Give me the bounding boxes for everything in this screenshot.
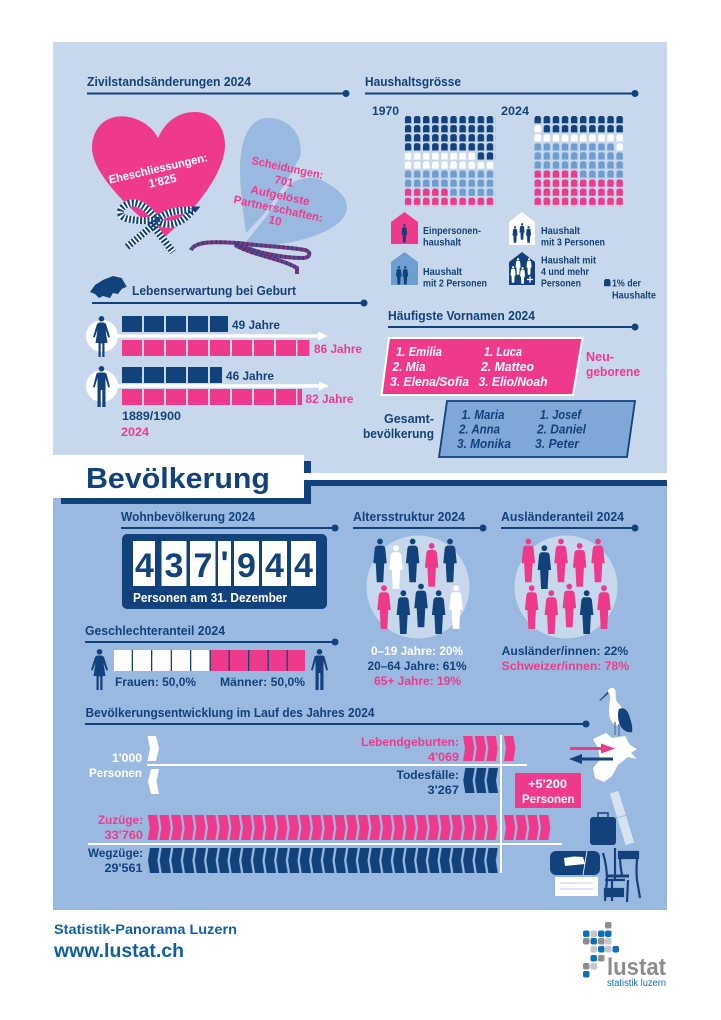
label: Männer: Männer: 50,0% [220, 675, 305, 689]
panel: Neugeborene names: 3. Elio/Noah [478, 375, 548, 389]
label: Eheschliessungen: Eheschliessungen: [108, 152, 209, 187]
section: Lebenserwartung [86, 276, 368, 439]
section: Bevölkerungsentwicklung [85, 688, 640, 902]
icon: stork [599, 688, 632, 736]
value: 46 Jahre: 46 Jahre [226, 369, 274, 383]
bar: Lebendgeburten [463, 736, 516, 761]
bar: women 2024 [122, 340, 310, 356]
legend: Haushalt mit 3 Personen: Haushalt [541, 226, 581, 237]
panel: Neugeborene names: 3. Elena/Sofia [390, 375, 469, 389]
labels: age groups: 65+ Jahre: 19% [374, 674, 461, 688]
bar: Zuzüge [148, 815, 551, 840]
panel: Neugeborene names: 2. Matteo [480, 360, 534, 374]
legend: Haushalt mit 3 Personen: mit 3 Personen [541, 238, 605, 248]
legend: Einpersonenhaushalt [391, 212, 481, 248]
label: Neugeborene: geborene [586, 365, 640, 379]
label: Scheidungen: Scheidungen: [250, 155, 324, 182]
logo: lustat [583, 922, 666, 989]
labels: age groups: 20–64 Jahre: 61% [368, 659, 467, 673]
legend: 1% der Haushalte: 1% der [612, 278, 641, 290]
icon: suitcase [590, 813, 616, 845]
section: Zivilstandsänderungen [87, 75, 350, 274]
bar: Todesfälle [463, 768, 498, 793]
heading: Lebenserwartung: Lebenserwartung bei Geburt [132, 284, 297, 298]
panel: Gesamtbevölkerung names: 2. Anna [458, 422, 500, 436]
callout: +5'200 Personen [515, 773, 581, 808]
legend: Haushalt mit 2 Personen: mit 2 Personen [423, 278, 487, 290]
legend: Haushalt mit 4 und mehr Personen: Personen [541, 278, 581, 290]
legend: Haushalt mit 4 und mehr Personen [509, 252, 597, 290]
legend: years: 2024 [121, 425, 149, 439]
counter: 437'944: 4 [265, 547, 284, 585]
legend: Einpersonenhaushalt: haushalt [423, 238, 462, 248]
counter: 437'944: 4 [135, 547, 154, 585]
heading: Zivilstandsänderungen: Zivilstandsänderungen 2024 [87, 75, 251, 89]
section: Ausländeranteil [501, 510, 638, 673]
label: Neugeborene [586, 350, 640, 379]
arrow: women [116, 332, 328, 340]
panel: Gesamtbevölkerung names: 3. Peter [535, 437, 580, 451]
footer: source text: www.lustat.ch [53, 941, 184, 962]
label: Gesamtbevölkerung [363, 412, 434, 441]
icon: chairs [603, 848, 640, 902]
scale axes [88, 735, 562, 873]
panel: top light background [53, 42, 667, 473]
footer: source text [53, 922, 237, 962]
icon: pink heart [92, 112, 225, 237]
label: Lebendgeburten [361, 735, 459, 764]
section: Geschlechteranteil [85, 624, 338, 690]
label: Wegzüge [88, 846, 143, 875]
icon: striped bow [120, 203, 193, 252]
label: Zuzüge: 33'760 [104, 828, 143, 842]
icon: bag with tag [550, 851, 600, 875]
label: 1970: 1970 [372, 104, 399, 118]
counter: 437'944: 9 [237, 547, 256, 585]
panel: bottom blue background [53, 480, 667, 910]
logo: lustat: statistik luzern [607, 978, 666, 989]
panel: Gesamtbevölkerung names: 3. Monika [457, 437, 511, 451]
banner accent band [61, 461, 667, 504]
legend: Haushalt mit 4 und mehr Personen: 4 und mehr [541, 267, 589, 278]
arrow: emigration [569, 754, 613, 764]
legend: years: 1889/1900 [122, 409, 181, 423]
section: Haushaltsgrösse [365, 75, 657, 302]
legend: 1'000 Personen: 1'000 [112, 751, 142, 765]
panel: Neugeborene names: 1. Luca [484, 345, 522, 359]
labels: nationality: Ausländer/innen: 22% [502, 644, 629, 658]
label: Scheidungen: 10 [267, 214, 283, 229]
label: Eheschliessungen: 1'825 [148, 173, 178, 191]
icon: woman [91, 649, 108, 690]
heading: Wohnbevölkerung: Wohnbevölkerung 2024 [121, 510, 255, 524]
labels: age groups: 0–19 Jahre: 20% [371, 644, 463, 658]
chart: households 2024 [534, 116, 626, 207]
footer: source text: Statistik-Panorama Luzern [54, 922, 237, 937]
label: Wegzüge: 29'561 [104, 861, 143, 875]
icon: woman in circle [86, 316, 118, 357]
labels: age groups [368, 644, 467, 688]
label: Wegzüge: Wegzüge: [88, 846, 143, 860]
icon: broken heart [240, 118, 347, 248]
bar: gender share [114, 650, 305, 671]
label: Frauen: Frauen: 50,0% [115, 675, 196, 689]
labels: nationality [502, 644, 630, 673]
title banner: Bevölkerung [86, 463, 270, 495]
icon: man [311, 649, 328, 690]
label: Todesfälle [396, 768, 459, 797]
panel: Neugeborene names: 2. Mia [392, 360, 426, 374]
arrow: men [116, 382, 329, 390]
label: Gesamtbevölkerung: Gesamt- [384, 412, 434, 426]
label: Scheidungen: Aufgelöste [249, 184, 311, 208]
heading: Altersstruktur: Altersstruktur 2024 [353, 510, 465, 524]
legend: Haushalt mit 3 Personen [509, 212, 605, 248]
legend: 1'000 Personen [89, 736, 159, 794]
panel: Neugeborene names: 1. Emilia [396, 345, 442, 359]
label: Lebendgeburten: 4'069 [428, 750, 459, 764]
legend: 1% der Haushalte: Haushalte [612, 290, 657, 302]
legend: 1% der Haushalte [604, 278, 657, 302]
heading: Haushaltsgrösse: Haushaltsgrösse [365, 75, 461, 89]
panel: Gesamtbevölkerung names: 1. Josef [540, 408, 583, 422]
icon: map of Switzerland [90, 276, 127, 298]
counter: 437'944: 7 [194, 547, 212, 585]
icon: rolled carpet [610, 791, 634, 845]
legend: Haushalt mit 2 Personen [391, 252, 487, 290]
chart: households 1970 [405, 116, 496, 207]
label: 2024: 2024 [501, 104, 529, 118]
section: Altersstruktur [353, 510, 486, 688]
logo: lustat: lustat [607, 954, 666, 981]
value: 49 Jahre: 49 Jahre [232, 318, 280, 332]
legend: Einpersonenhaushalt: Einpersonen- [423, 226, 481, 237]
legend: years [121, 409, 181, 439]
counter: 437'944: 3 [165, 547, 183, 585]
panel: Gesamtbevölkerung names: 2. Daniel [536, 422, 586, 436]
legend: 1'000 Personen: Personen [89, 766, 142, 780]
counter: 437'944: Personen am 31. Dezember [133, 591, 287, 605]
icon: map of canton Lucerne [593, 733, 637, 782]
label: Lebendgeburten: Lebendgeburten: [361, 735, 459, 749]
panel: Gesamtbevölkerung names [439, 401, 635, 457]
label: Scheidungen: Partnerschaften: [232, 194, 324, 225]
heading: Ausländeranteil: Ausländeranteil 2024 [501, 510, 624, 524]
label: Zuzüge [98, 813, 143, 842]
section: Häufigste Vornamen [363, 309, 640, 457]
label: Todesfälle: 3'267 [428, 783, 459, 797]
bar: Wegzüge [148, 848, 498, 873]
label: Gesamtbevölkerung: bevölkerung [363, 427, 434, 441]
heading: Bevölkerungsentwicklung: Bevölkerungsentwicklung im Lauf des Jahres 2024 [86, 706, 375, 720]
counter: 437'944: ' [220, 545, 229, 583]
labels: nationality: Schweizer/innen: 78% [502, 659, 630, 673]
callout: +5'200 Personen: Personen [522, 792, 574, 806]
label: Neugeborene: Neu- [586, 350, 614, 364]
panel: Gesamtbevölkerung names: 1. Maria [462, 408, 505, 422]
counter: 437'944: 4 [294, 547, 313, 585]
icon: rope [191, 242, 309, 274]
heading: Vornamen: Häufigste Vornamen 2024 [388, 309, 535, 323]
label: Todesfälle: Todesfälle: [396, 768, 459, 782]
heading: Geschlechteranteil: Geschlechteranteil 2024 [85, 624, 225, 638]
value: 86 Jahre: 86 Jahre [314, 342, 362, 356]
label: Scheidungen [232, 155, 324, 229]
legend: Haushalt mit 4 und mehr Personen: Haushalt mit [541, 256, 597, 266]
section: Wohnbevölkerung [121, 510, 338, 609]
bar: men 2024 [122, 389, 302, 405]
label: Scheidungen: 701 [273, 174, 295, 190]
bar: women 1889/1900 [122, 316, 228, 332]
bar: men 1889/1900 [122, 367, 222, 383]
value: 82 Jahre: 82 Jahre [306, 392, 354, 406]
chart: nationality pictogram [514, 536, 618, 638]
legend: Haushalt mit 2 Personen: Haushalt [423, 267, 463, 278]
icon: white box [555, 877, 598, 896]
arrow: immigration [570, 744, 615, 754]
callout: +5'200 Personen: +5'200 [528, 777, 567, 791]
title banner [53, 455, 304, 498]
label: Zuzüge: Zuzüge: [98, 813, 143, 827]
icon: man in circle [86, 366, 118, 407]
counter: 437'944 [122, 534, 327, 609]
panel: Neugeborene names [382, 338, 582, 395]
chart: age pictogram [366, 536, 470, 638]
